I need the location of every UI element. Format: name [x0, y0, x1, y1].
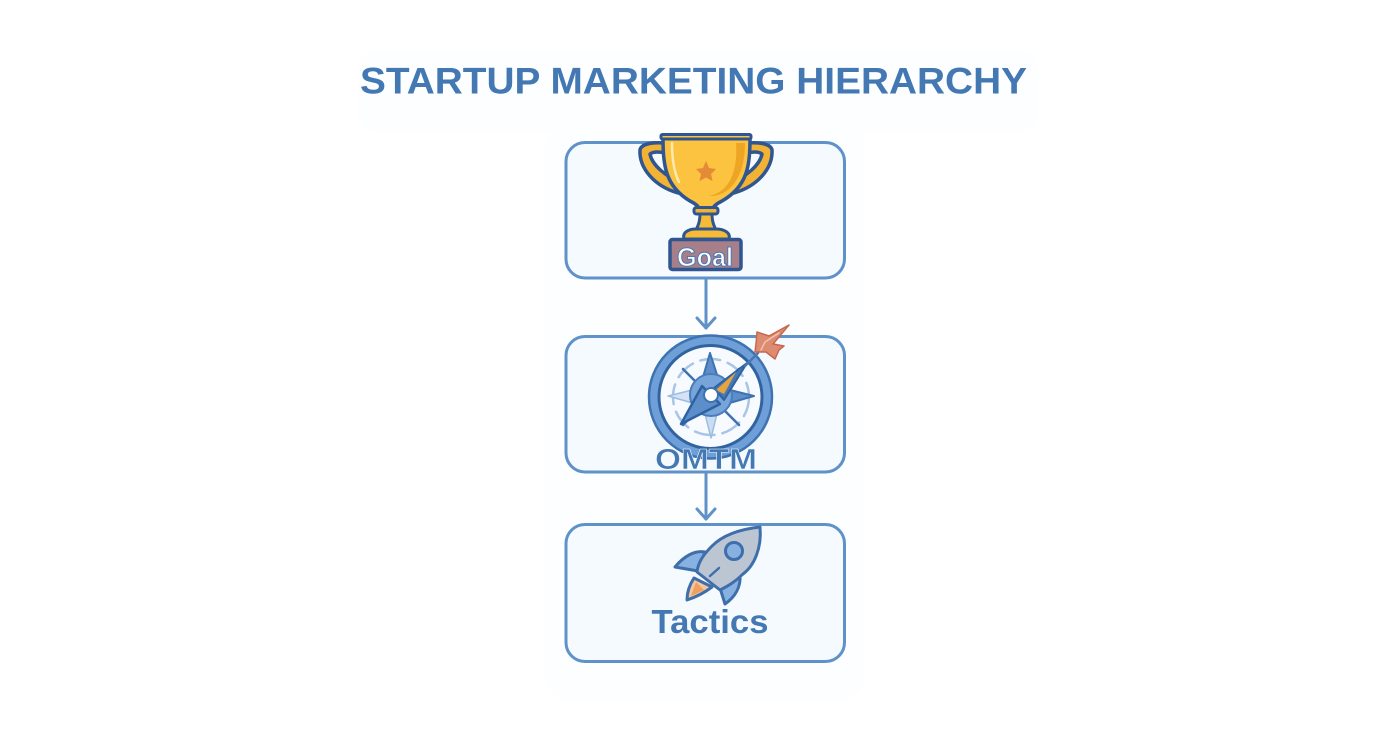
label: Tactics: Tactics	[652, 603, 768, 640]
panel: Goal	[566, 134, 844, 278]
panel: Tactics	[566, 524, 844, 662]
label: OMTM: OMTM	[655, 444, 757, 476]
arrow: OMTM to Tactics	[697, 474, 715, 519]
panel: OMTM	[566, 325, 844, 476]
icon: rocket	[675, 527, 760, 604]
title: STARTUP MARKETING HIERARCHY	[360, 60, 1027, 102]
label: Goal: Goal	[677, 242, 733, 272]
icon: trophy	[640, 134, 772, 270]
arrow: Goal to OMTM	[697, 280, 715, 328]
icon: compass with dart	[649, 325, 789, 458]
